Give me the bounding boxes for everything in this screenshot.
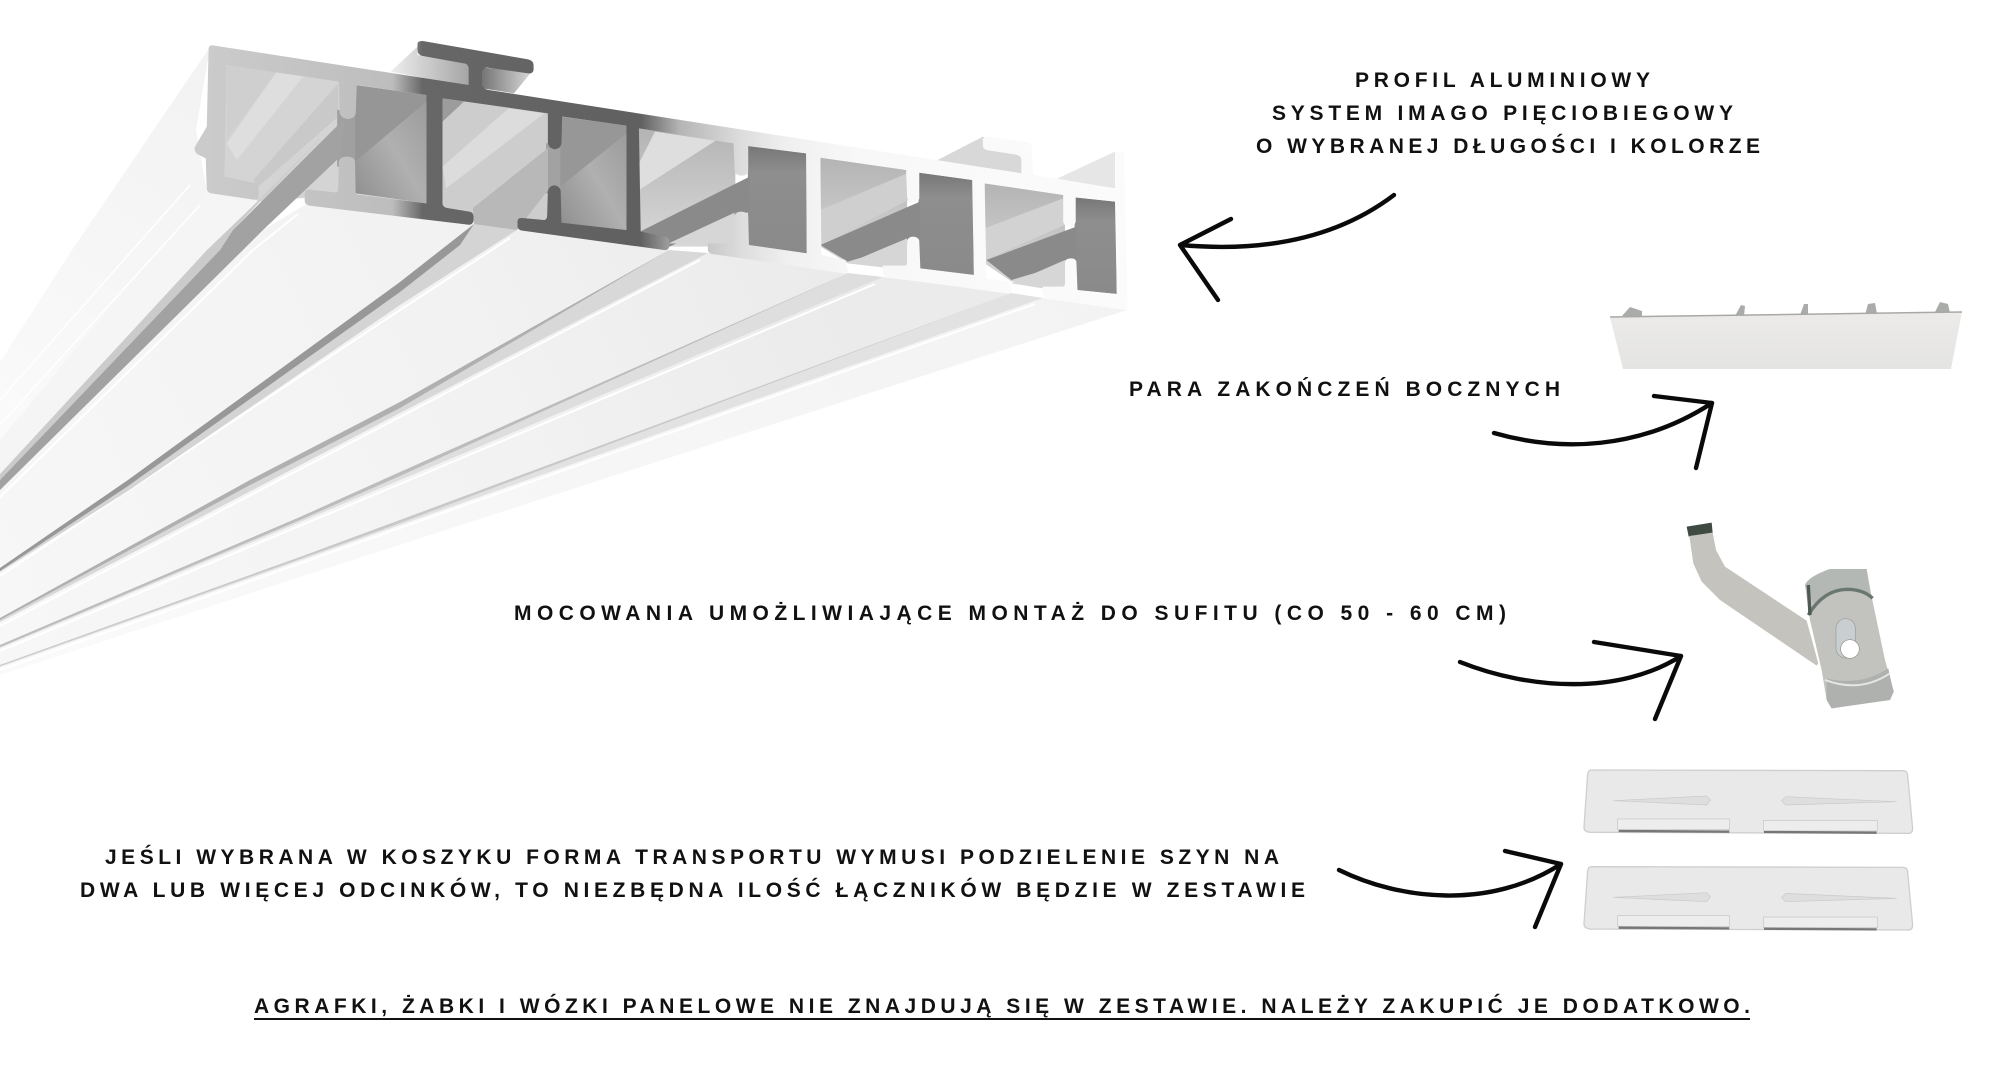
arrow: to aluminium profile <box>1180 195 1394 300</box>
arrow: to end cap <box>1494 396 1712 468</box>
label: connectors note: DWA LUB WIĘCEJ ODCINKÓW, TO NIEZBĘDNA ILOŚĆ ŁĄCZNIKÓW BĘDZIE W ZESTAWIE <box>80 878 1305 902</box>
rear T-slot surfaces behind the profile <box>391 47 1115 188</box>
label: connectors note <box>80 845 1305 902</box>
footer note: AGRAFKI, ŻABKI I WÓZKI PANELOWE NIE ZNAJDUJĄ SIĘ W ZESTAWIE. NALEŻY ZAKUPIĆ JE DODATKOWO. <box>254 994 1750 1018</box>
slat 1 <box>0 205 474 568</box>
channel interiors seen through the profile <box>225 65 1117 294</box>
slat 3 <box>0 253 848 645</box>
groove 1 <box>0 118 345 490</box>
arrow: to connectors <box>1339 851 1561 927</box>
rail illustration: aluminium five-track profile <box>0 41 1127 675</box>
icon: rail connector top <box>1584 770 1913 833</box>
left lip slat <box>0 192 259 474</box>
slat 4 <box>0 277 1011 665</box>
slat 2 <box>0 230 669 618</box>
icon: ceiling mounting bracket <box>1687 523 1894 708</box>
icon: rail connector bottom <box>1584 867 1913 930</box>
label: aluminium profile: SYSTEM IMAGO PIĘCIOBIEGOWY <box>1272 102 1733 125</box>
icon: side end cap <box>1610 302 1962 369</box>
groove 2 <box>0 148 548 572</box>
label: aluminium profile <box>1256 69 1760 158</box>
label: aluminium profile: PROFIL ALUMINIOWY <box>1355 69 1650 92</box>
label: aluminium profile: O WYBRANEJ DŁUGOŚCI I KOLORZE <box>1256 134 1760 158</box>
groove 3 <box>0 250 708 622</box>
groove 5 <box>0 293 1043 667</box>
label: ceiling mounts: MOCOWANIA UMOŻLIWIAJĄCE MONTAŻ DO SUFITU (CO 50 - 60 CM) <box>514 602 1506 625</box>
slat 5 <box>0 298 1127 675</box>
rail outer left wall <box>0 47 210 445</box>
groove 4 <box>0 273 883 648</box>
label: connectors note: JEŚLI WYBRANA W KOSZYKU FORMA TRANSPORTU WYMUSI PODZIELENIE SZYN NA <box>105 845 1279 869</box>
profile cross-section face <box>195 41 1127 310</box>
arrow: to bracket <box>1460 642 1681 719</box>
label: end caps: PARA ZAKOŃCZEŃ BOCZNYCH <box>1129 378 1560 401</box>
